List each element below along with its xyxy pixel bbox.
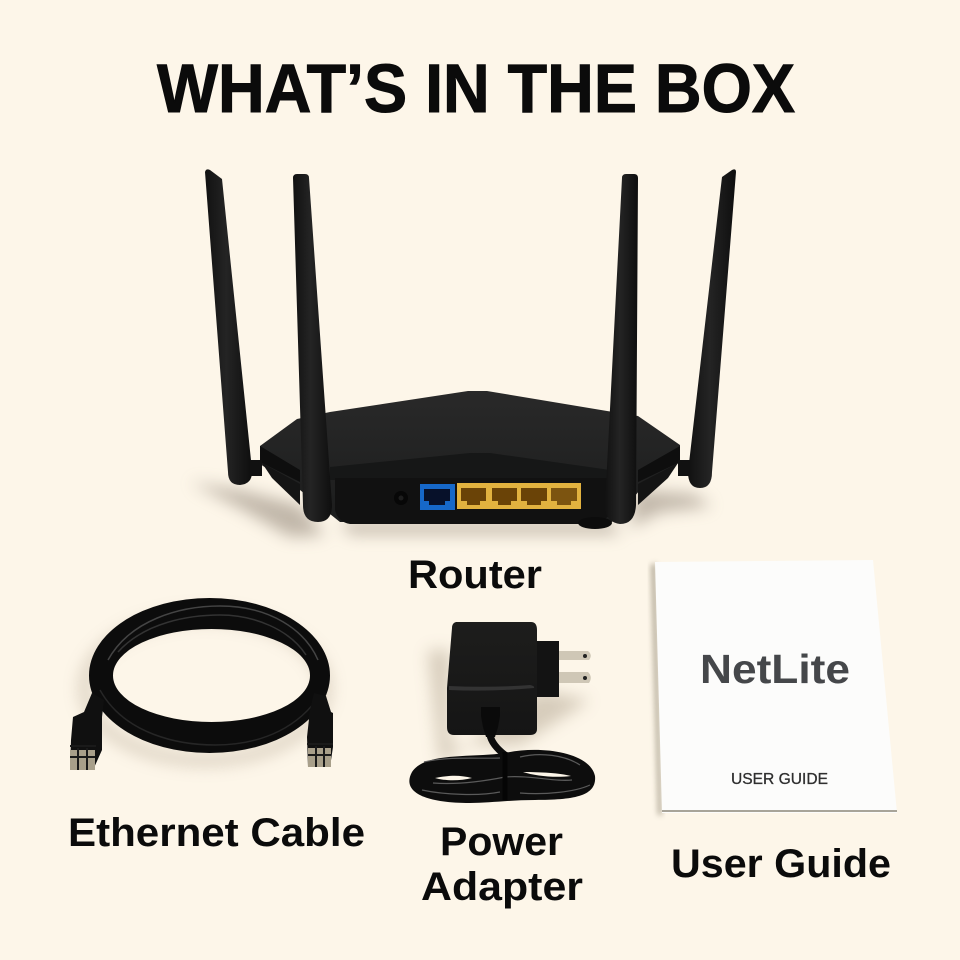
router label: Router: [408, 553, 542, 597]
blue WAN port: [420, 484, 455, 510]
power adapter label: Power: [440, 820, 563, 864]
power adapter illustration: [409, 622, 595, 803]
power adapter label: Adapter: [421, 865, 583, 909]
booklet caption: USER GUIDE: [731, 771, 828, 788]
adapter plug base: [537, 641, 559, 697]
booklet cover: [655, 560, 897, 813]
router body: [260, 391, 680, 529]
user guide booklet: [651, 560, 897, 815]
title: WHAT’S IN THE BOX: [157, 50, 795, 127]
adapter shadow: [428, 650, 590, 765]
adapter prongs: [558, 651, 591, 683]
user guide label: User Guide: [671, 842, 891, 886]
cable shadow: [85, 616, 325, 760]
router shadow: [190, 482, 712, 537]
cable coil: [89, 598, 330, 753]
left connector: [70, 693, 104, 770]
router illustration: [190, 169, 736, 537]
ethernet cable label: Ethernet Cable: [68, 811, 365, 855]
antennas: [205, 169, 736, 524]
booklet page edge: [662, 810, 897, 812]
power adapter label: [421, 820, 583, 909]
ethernet cable illustration: [70, 598, 333, 770]
right connector: [307, 693, 333, 767]
booklet shadow: [651, 563, 662, 815]
adapter body: [447, 622, 537, 735]
power cord coil: [409, 735, 595, 803]
strain relief: [481, 707, 500, 737]
power jack: [394, 491, 408, 505]
yellow LAN ports: [457, 483, 581, 509]
booklet brand: NetLite: [700, 646, 850, 692]
